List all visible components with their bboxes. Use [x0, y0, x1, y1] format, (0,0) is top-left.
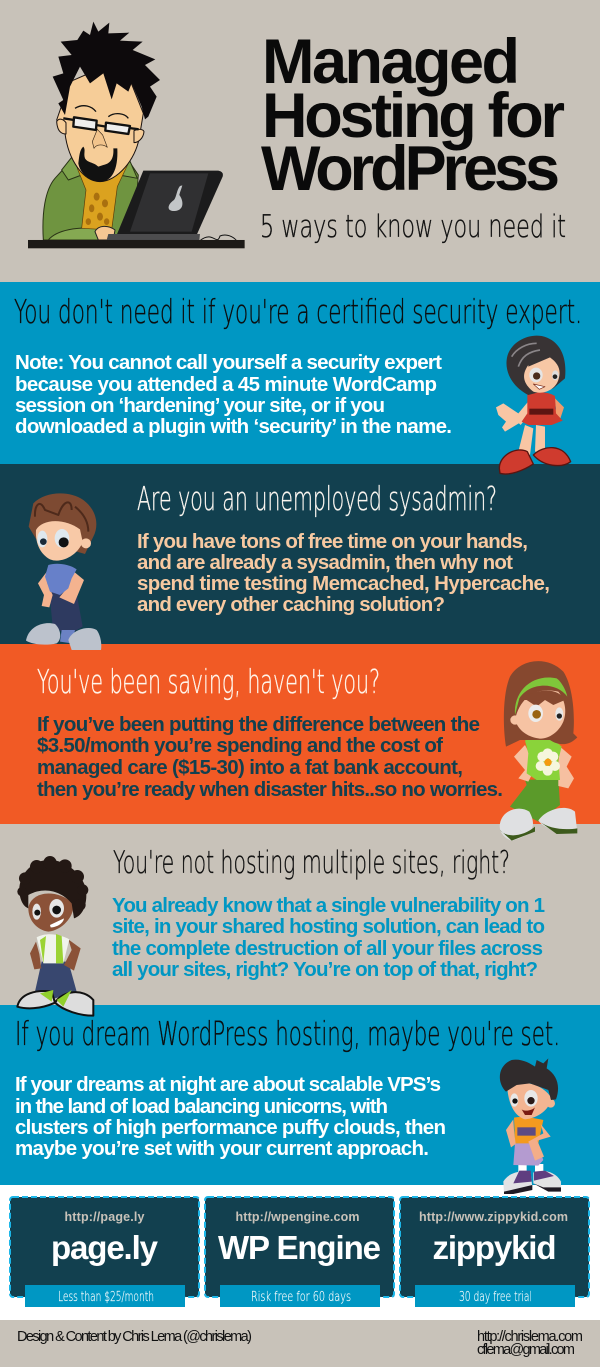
title: Managed [262, 27, 520, 97]
body text [137, 530, 550, 616]
body text: $3.50/month you’re spending and the cost of [37, 734, 443, 757]
body text: If you have tons of free time on your hands, [137, 530, 528, 553]
tab label: Risk free for 60 days [251, 1290, 351, 1305]
character: boy in blue shirt [26, 493, 101, 650]
title [261, 27, 565, 204]
tab [220, 1285, 380, 1307]
tab label: Less than $25/month [58, 1290, 154, 1305]
character: boy in orange shirt [500, 1058, 561, 1194]
tab [415, 1285, 575, 1307]
body text: site, in your shared hosting solution, can lead to [112, 915, 545, 938]
panel: zippykid card [400, 1197, 589, 1307]
panel: dream hosting [0, 1005, 600, 1185]
body text [37, 713, 503, 801]
body text: and are already a sysadmin, then why not [137, 551, 513, 574]
panel: security expert [0, 282, 600, 464]
url: http://wpengine.com [236, 1210, 360, 1224]
body text: Note: You cannot call yourself a security expert [15, 351, 442, 374]
body text [112, 894, 545, 981]
name: WP Engine [218, 1229, 381, 1266]
name: zippykid [432, 1229, 556, 1266]
title: WordPress [261, 134, 560, 204]
panel: saving [0, 644, 600, 824]
panel: WP Engine card [205, 1197, 394, 1307]
body text: then you’re ready when disaster hits..so no worries. [37, 778, 503, 801]
laptop [117, 171, 223, 235]
hair and head [57, 70, 143, 182]
body text: in the land of load balancing unicorns, with [15, 1095, 388, 1118]
url: http://www.zippykid.com [419, 1210, 568, 1224]
body text: You already know that a single vulnerability on 1 [112, 894, 545, 917]
illustration: man with laptop [28, 22, 245, 248]
body text: spend time testing Memcached, Hypercache, [137, 572, 550, 595]
contact: cflema@gmail.com [477, 1342, 575, 1358]
tab [25, 1285, 185, 1307]
character: girl with green headband [500, 661, 577, 841]
name: page.ly [51, 1229, 159, 1266]
body text [15, 1073, 446, 1160]
url: http://page.ly [64, 1210, 145, 1224]
character: boy with curly hair [17, 856, 93, 1016]
contact: http://chrislema.com [477, 1329, 583, 1345]
contact [477, 1329, 583, 1358]
body text: If you’ve been putting the difference between the [37, 713, 480, 736]
body text: all your sites, right? You’re on top of that, right? [112, 958, 538, 981]
body text: maybe you’re set with your current approach. [15, 1137, 429, 1160]
title: Hosting for [262, 81, 565, 151]
panel: page.ly card [10, 1197, 199, 1307]
character: girl in red dress [496, 336, 571, 474]
panel: unemployed sysadmin [0, 464, 600, 644]
body text: If your dreams at night are about scalable VPS’s [15, 1073, 441, 1096]
footer [0, 1320, 600, 1367]
body text [15, 351, 452, 438]
body text: session on ‘hardening’ your site, or if you [15, 394, 385, 417]
tab label: 30 day free trial [459, 1290, 532, 1305]
body text: and every other caching solution? [137, 593, 445, 616]
body text: the complete destruction of all your files across [112, 937, 543, 960]
body text: managed care ($15-30) into a fat bank account, [37, 756, 463, 779]
body text: downloaded a plugin with ‘security’ in the name. [15, 415, 452, 438]
body text: because you attended a 45 minute WordCamp [15, 373, 437, 396]
panel: multiple sites [0, 824, 600, 1005]
credit: Design & Content by Chris Lema (@chrislema) [17, 1329, 252, 1345]
heading: You've been saving, haven't you? [37, 662, 380, 701]
panel: header [0, 0, 600, 282]
body text: clusters of high performance puffy clouds, then [15, 1116, 446, 1139]
